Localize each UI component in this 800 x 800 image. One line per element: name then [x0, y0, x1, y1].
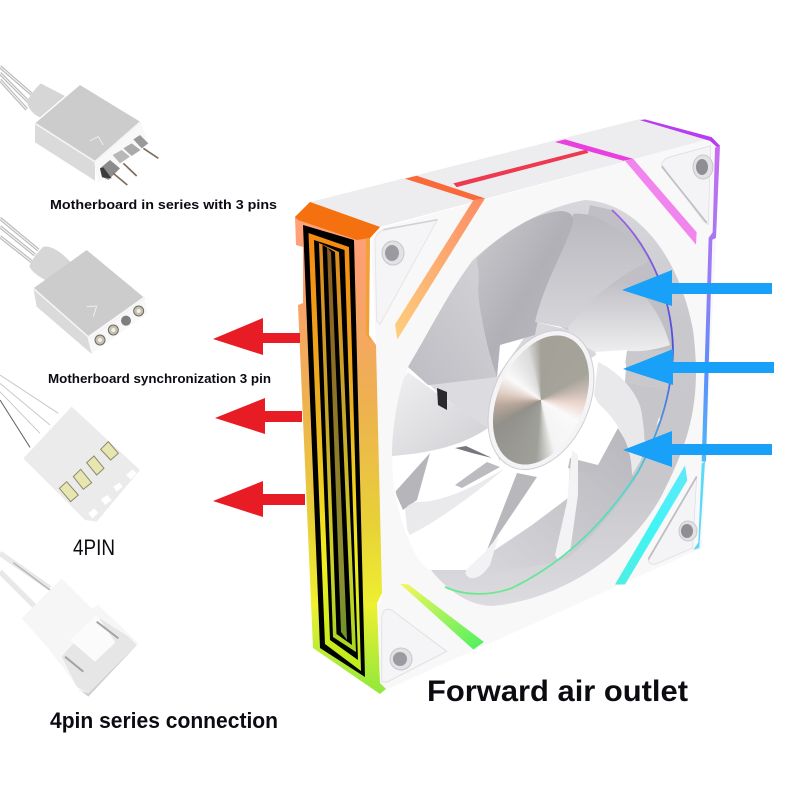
magenta top stripe	[555, 139, 633, 161]
blade 2	[477, 211, 573, 377]
screw hole: top right	[693, 155, 713, 179]
magenta diagonal stripe	[625, 159, 697, 245]
corner pad: top left	[375, 220, 437, 324]
frame lighting and corners	[375, 119, 720, 682]
RGB ring	[445, 210, 673, 594]
connector: 4PIN	[0, 375, 140, 522]
blade: behind upper right	[588, 205, 672, 350]
red top line	[453, 149, 588, 187]
blade H	[405, 468, 505, 536]
see-through centre	[392, 300, 660, 570]
lower right edge	[693, 462, 705, 550]
screw hole: top left	[382, 241, 404, 265]
label: motherboard in series: Motherboard in series with 3 pins	[50, 197, 277, 212]
shadow under blade	[455, 446, 492, 458]
lower grey block	[625, 382, 660, 442]
red arrow: middle outlet	[215, 398, 302, 434]
blade 4	[568, 294, 670, 352]
blade 3	[535, 214, 628, 328]
red arrow: lower outlet	[213, 481, 305, 517]
label: 4PIN: 4PIN	[73, 535, 115, 560]
corner pad: top right	[662, 146, 711, 225]
pad groove: top right	[662, 166, 707, 223]
top face of frame	[310, 119, 713, 227]
metallic hub	[467, 314, 615, 486]
front face of frame	[371, 138, 720, 692]
thin blade	[555, 450, 578, 560]
orange diagonal stripe	[395, 198, 485, 339]
blade G	[392, 372, 488, 456]
label: 4pin series connection: 4pin series connection	[50, 708, 278, 733]
pad groove: bottom right	[648, 477, 697, 559]
fan blades	[392, 205, 673, 578]
connector: 4pin series	[0, 553, 138, 697]
yellow-green diagonal stripe	[400, 584, 484, 650]
blade 6	[490, 428, 636, 564]
screw hole: bottom left	[390, 648, 412, 670]
blade 5	[594, 362, 644, 475]
purple top edge	[640, 119, 720, 148]
strut blade side	[487, 473, 537, 550]
white gap	[595, 350, 627, 364]
heading: forward air outlet: Forward air outlet	[427, 675, 688, 708]
cyan diagonal stripe	[615, 465, 687, 585]
blue arrow: middle intake	[623, 349, 774, 385]
corner pad: bottom left	[382, 609, 447, 682]
grey block	[625, 351, 652, 387]
blue arrow: lower intake	[623, 431, 772, 467]
connector: motherboard synchronization 3 pin	[0, 218, 147, 354]
area near hub	[430, 377, 505, 462]
strut blade tail	[465, 535, 499, 578]
blue arrow: upper intake	[622, 270, 772, 306]
connector: motherboard in series 3 pins	[0, 67, 158, 185]
corner pad: bottom right	[648, 477, 697, 564]
left strut	[395, 453, 430, 510]
red arrow: upper outlet	[213, 318, 300, 355]
orange top stripe	[405, 176, 485, 200]
right RGB edge	[702, 146, 720, 462]
pad groove: top left	[383, 220, 437, 230]
fan illustration	[295, 119, 720, 694]
blade 1	[408, 260, 497, 390]
grey strip	[455, 462, 500, 488]
block under hub	[568, 458, 598, 468]
dark notch	[437, 388, 447, 410]
side panel: RGB light bar	[295, 202, 386, 694]
white gap under hub	[577, 403, 618, 463]
fan opening wall	[392, 200, 696, 606]
hub backing	[497, 322, 600, 380]
label: motherboard synchronization: Motherboard synchronization 3 pin	[48, 372, 271, 386]
screw hole: bottom right	[679, 521, 697, 541]
